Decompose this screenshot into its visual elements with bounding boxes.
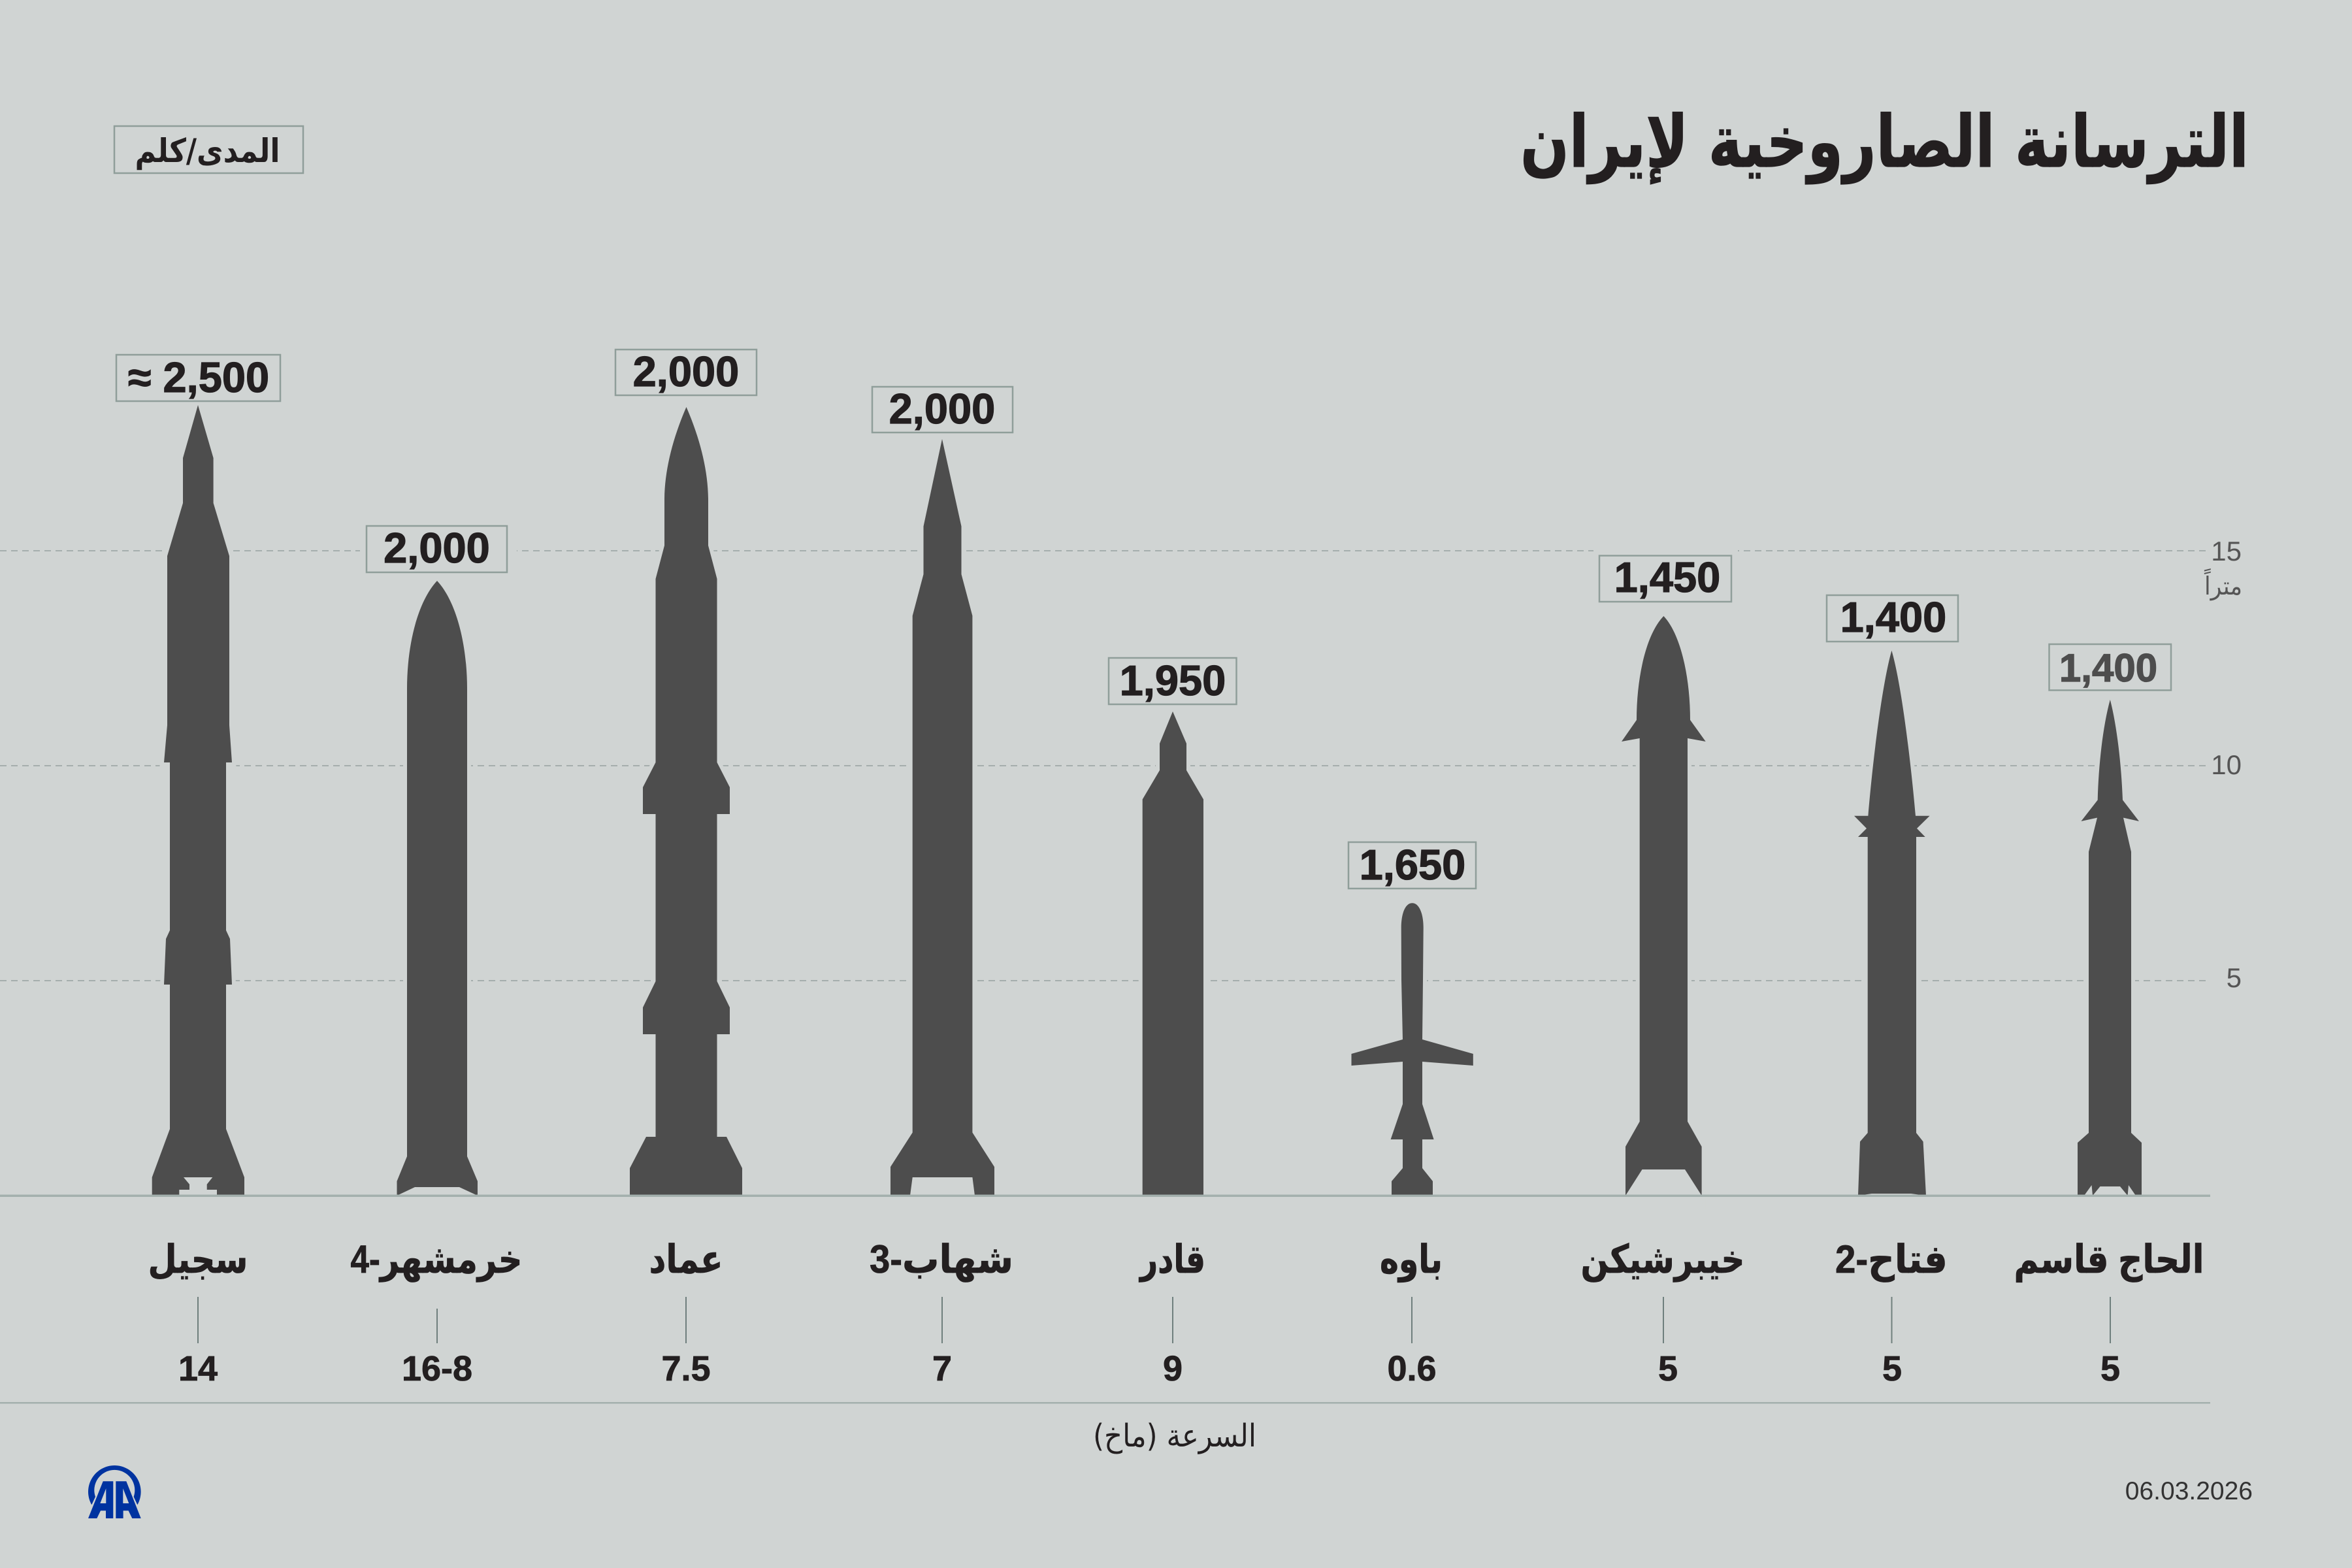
range label: Sejjil: ≈ 2,500 — [128, 353, 269, 401]
height axis labels — [2204, 536, 2242, 993]
speed: Khorramshahr-4: 16-8 — [402, 1349, 472, 1388]
silhouette: Emad — [630, 407, 742, 1196]
height axis labels: 10 — [2211, 749, 2242, 780]
missile: Kheibar Shekan — [1581, 553, 1744, 1388]
missile: Fateh-2 — [1827, 593, 1958, 1388]
name: Kheibar Shekan: خيبرشيكن — [1581, 1237, 1744, 1282]
silhouette: Shahab-3 — [890, 439, 994, 1196]
name: Emad: عماد — [649, 1237, 723, 1281]
legend: range unit — [114, 126, 303, 173]
silhouette: Fateh-2 — [1854, 651, 1930, 1196]
height axis labels: متراً — [2204, 568, 2242, 601]
missile: Paveh — [1348, 841, 1476, 1388]
height axis labels: 5 — [2227, 962, 2242, 993]
speed: Shahab-3: 7 — [932, 1349, 952, 1388]
icon: AA logo — [88, 1465, 141, 1518]
silhouette: Haj Qasem — [2078, 700, 2142, 1196]
silhouette: Khorramshahr-4 — [397, 581, 478, 1196]
height axis labels: 15 — [2211, 536, 2242, 566]
range label: Kheibar Shekan: 1,450 — [1614, 553, 1720, 601]
name: Qadr: قادر — [1139, 1237, 1205, 1282]
speed: Kheibar Shekan: 5 — [1658, 1349, 1678, 1388]
name: Fateh-2: فتاح-2 — [1835, 1237, 1948, 1282]
name: Shahab-3: شهاب-3 — [870, 1237, 1013, 1282]
range label: Shahab-3: 2,000 — [889, 385, 995, 433]
missile: Emad — [615, 348, 757, 1388]
range label: Fateh-2: 1,400 — [1840, 593, 1946, 641]
name: Sejjil: سجيل — [148, 1237, 248, 1281]
silhouette: Kheibar Shekan — [1622, 616, 1706, 1196]
missile: Qadr — [1109, 657, 1236, 1388]
range label: Emad: 2,000 — [633, 348, 739, 395]
missile: Haj Qasem — [2014, 644, 2204, 1388]
speed: Sejjil: 14 — [178, 1349, 218, 1388]
speed: Emad: 7.5 — [661, 1349, 711, 1388]
silhouette: Qadr — [1143, 711, 1203, 1196]
speed axis caption: السرعة (ماخ) — [1093, 1418, 1256, 1454]
speed divider — [0, 1402, 2210, 1403]
legend: range unit: المدى/كلم — [135, 132, 280, 170]
speed: Qadr: 9 — [1163, 1349, 1183, 1388]
speed: Paveh: 0.6 — [1387, 1349, 1437, 1388]
date: 06.03.2026 — [2125, 1477, 2253, 1505]
range label: Qadr: 1,950 — [1120, 657, 1226, 704]
range label: Khorramshahr-4: 2,000 — [384, 524, 490, 572]
missile: Sejjil — [116, 353, 280, 1388]
baseline — [0, 1194, 2210, 1197]
range label: Haj Qasem: 1,400 — [2059, 646, 2157, 690]
speed: Fateh-2: 5 — [1882, 1349, 1902, 1388]
name: Haj Qasem: الحاج قاسم — [2014, 1237, 2204, 1282]
silhouette: Paveh — [1351, 903, 1473, 1196]
silhouette: Sejjil — [152, 405, 244, 1196]
missile: Khorramshahr-4 — [350, 524, 523, 1388]
range label: Paveh: 1,650 — [1360, 841, 1465, 889]
name: Paveh: باوه — [1380, 1237, 1443, 1282]
name: Khorramshahr-4: خرمشهر-4 — [350, 1237, 523, 1282]
missile: Shahab-3 — [870, 385, 1013, 1388]
speed: Haj Qasem: 5 — [2100, 1349, 2120, 1388]
